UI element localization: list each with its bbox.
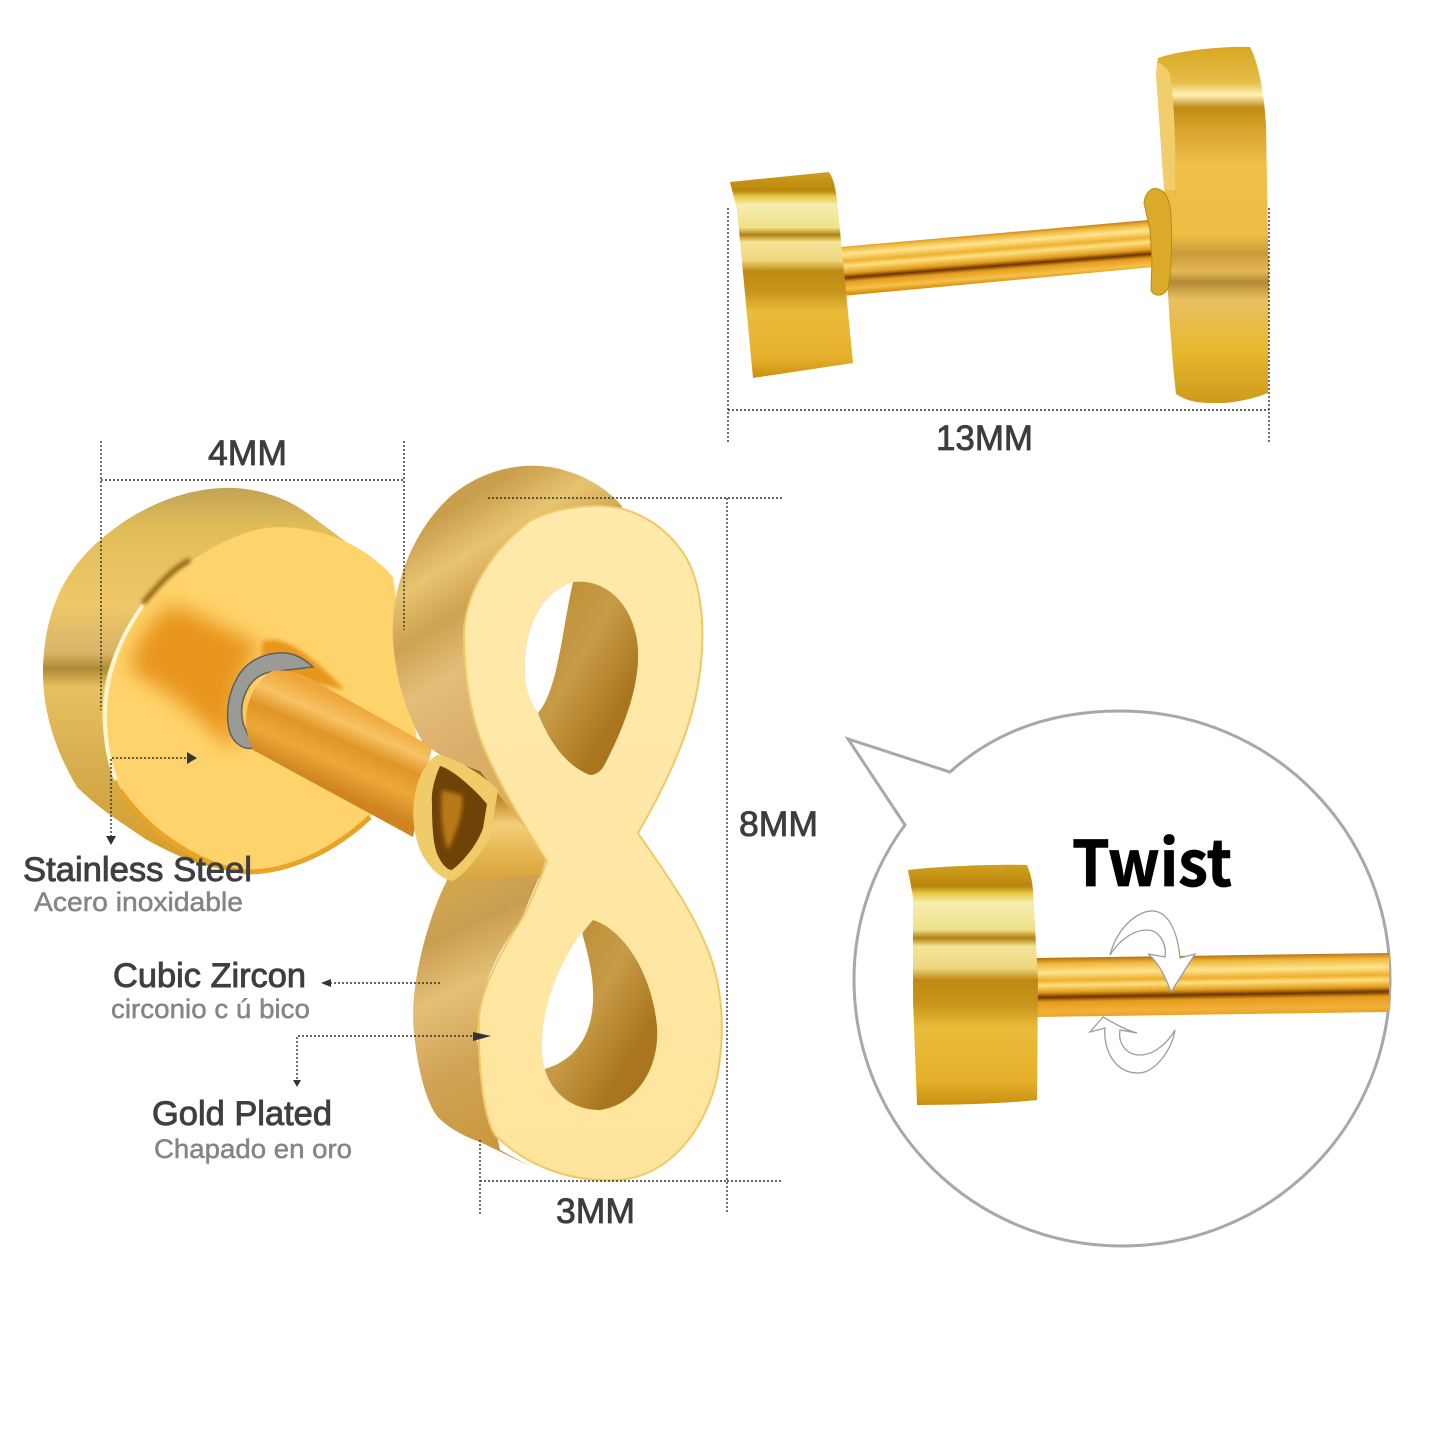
4MM dimension: [101, 434, 404, 710]
13MM dimension: [728, 208, 1269, 458]
steel ring: [228, 653, 313, 748]
label: stainless steel: Stainless Steel: [23, 851, 252, 889]
back disc face: [102, 527, 420, 872]
speech bubble: [848, 711, 1390, 1246]
small head: [730, 172, 853, 378]
infinity upper side: [393, 466, 622, 861]
3MM dimension: 3MM: [556, 1192, 635, 1231]
label: gold plated: Chapado en oro: [154, 1134, 352, 1164]
infinity face: [464, 506, 722, 1180]
collar opening glow: [441, 790, 463, 850]
head: [908, 865, 1038, 1105]
twist heading: Twist: [1072, 814, 1232, 905]
disc bottom edge: [120, 790, 370, 872]
infinity connecting strip: [440, 756, 547, 880]
icon: lower rotate arrow: [1090, 1017, 1175, 1073]
lower hole opening: [542, 932, 593, 1069]
3MM dimension: [480, 1140, 727, 1231]
main infinity earring: [43, 466, 722, 1180]
orange reflection: [130, 605, 262, 748]
halo above pin: [262, 640, 345, 690]
4MM dimension: 4MM: [208, 434, 287, 473]
pin: [840, 220, 1154, 296]
pin: [1036, 953, 1389, 1017]
collar opening: [432, 766, 487, 870]
upper hole opening: [525, 582, 573, 713]
icon: upper rotate arrow: [1110, 911, 1195, 992]
side view earring: [730, 47, 1269, 403]
label: cubic zircon: circonio c ú bico: [111, 994, 310, 1024]
collar: [1144, 189, 1172, 295]
13MM dimension: 13MM: [936, 419, 1033, 458]
back disc rim: [43, 488, 393, 872]
shaft: [246, 670, 432, 837]
callout: twist detail: [848, 711, 1390, 1246]
label: cubic zircon: [111, 957, 442, 1024]
upper hole interior: [525, 582, 638, 775]
pale inner strip: [1156, 62, 1175, 190]
label: cubic zircon: Cubic Zircon: [113, 957, 306, 995]
big head: [1156, 47, 1269, 403]
dark arc: [143, 560, 190, 603]
collar: [413, 755, 498, 881]
label: stainless steel: Acero inoxidable: [34, 887, 243, 917]
label: stainless steel: [23, 752, 252, 917]
highlight arc: [105, 605, 143, 780]
8MM dimension: [488, 498, 818, 1214]
lower hole interior: [542, 920, 657, 1110]
infinity lower side: [413, 875, 540, 1166]
label: gold plated: [152, 1032, 491, 1164]
8MM dimension: 8MM: [739, 805, 818, 844]
label: gold plated: Gold Plated: [152, 1095, 332, 1133]
